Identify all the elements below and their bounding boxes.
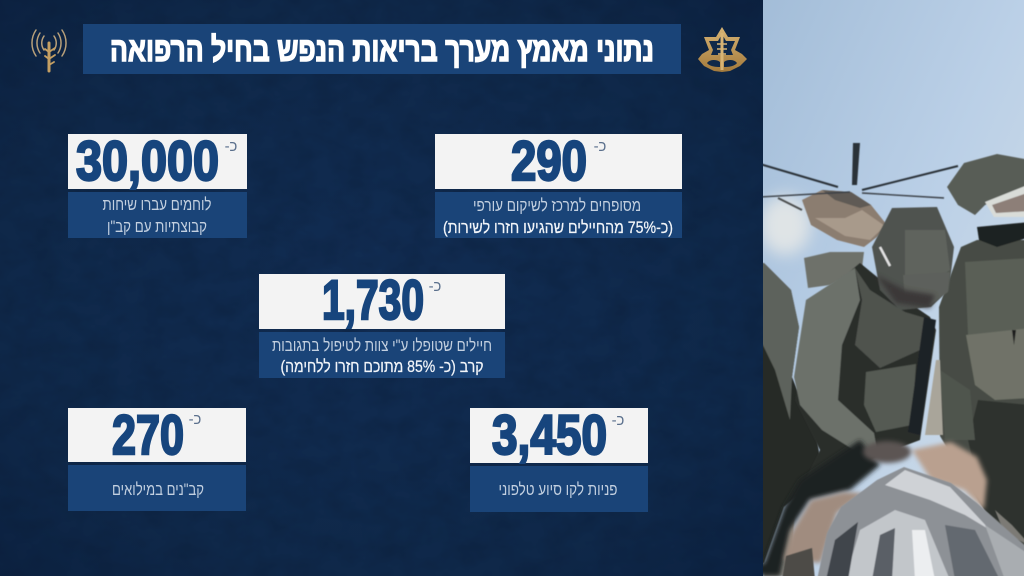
stat card: 290: מסופחים למרכז לשיקום עורפי: [473, 196, 641, 215]
title banner: נתוני מאמץ מערך בריאות הנפש בחיל הרפואה: [110, 31, 654, 69]
stat card: 270: [68, 403, 246, 511]
stat card: 270: קב"נים במילואים: [112, 480, 204, 499]
rocky ground: [764, 360, 1024, 576]
stat card: 1,730: קרב (כ- 85% מתוכם חזרו ללחימה): [280, 357, 484, 376]
stat card: 30,000: [68, 129, 247, 238]
stat card: 270: כ-: [189, 411, 202, 428]
stat card: 290: 290: [511, 129, 587, 192]
left soldier: [758, 263, 821, 563]
stat card: 1,730: [259, 268, 505, 378]
patient skin: [784, 441, 987, 563]
background panel: [0, 0, 763, 576]
medic soldier: [794, 207, 954, 490]
stat card: 270: 270: [112, 403, 184, 466]
title banner: [83, 24, 681, 74]
stat card: 3,450: כ-: [612, 412, 625, 429]
foil blanket: [817, 467, 1024, 576]
icon: IDF emblem: [698, 27, 747, 72]
right soldier: [939, 154, 1024, 576]
stat card: 1,730: 1,730: [322, 268, 424, 331]
lower left shadow: [758, 440, 880, 576]
stat card: 290: [435, 129, 682, 238]
stat card: 3,450: פניות לקו סיוע טלפוני: [498, 480, 618, 499]
stat card: 30,000: לוחמים עברו שיחות: [102, 195, 212, 214]
icon: antenna emblem: [32, 30, 66, 71]
stat card: 30,000: כ-: [225, 138, 238, 155]
stat card: 3,450: [470, 403, 648, 512]
backpack behind medic: [804, 252, 864, 288]
stat card: 290: (כ-75% מהחיילים שהגיעו חזרו לשירות): [443, 218, 673, 237]
stat card: 1,730: חיילים שטופלו ע"י צוות לטיפול בתגובות: [272, 336, 492, 355]
stat card: 30,000: 30,000: [76, 129, 219, 192]
stat card: 290: כ-: [594, 138, 607, 155]
stat card: 1,730: כ-: [429, 278, 442, 295]
stat card: 3,450: 3,450: [492, 403, 607, 466]
photo: soldiers treating a wounded comrade by a helicopter: [758, 0, 1024, 576]
helicopter: [760, 143, 958, 247]
stat card: 30,000: קבוצתיות עם קב"ן: [107, 217, 207, 236]
